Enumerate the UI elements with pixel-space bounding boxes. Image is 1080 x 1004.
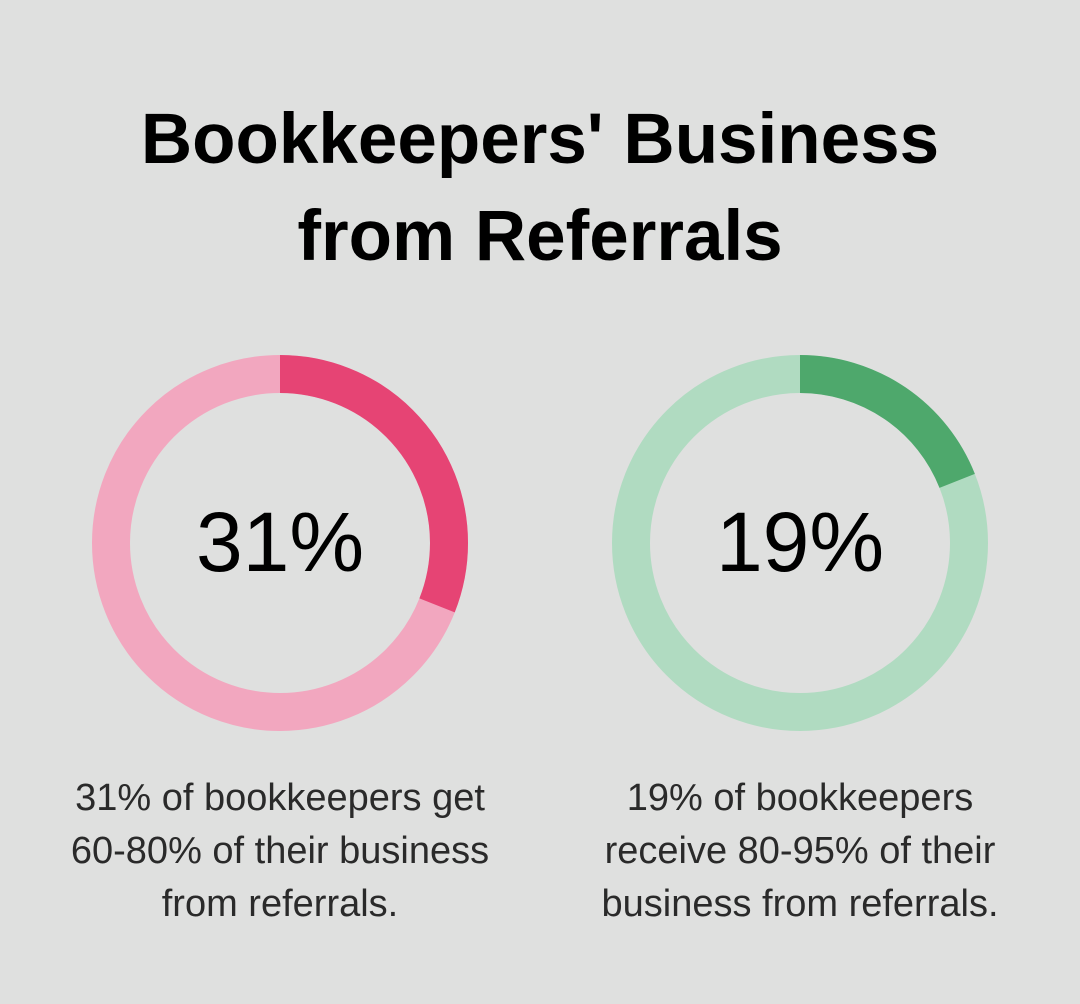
description: 19% — [601, 777, 998, 925]
description: 19%: receive 80-95% of their — [605, 830, 995, 872]
description: 31%: 31% of bookkeepers get — [75, 777, 485, 819]
donut: 31% — [111, 374, 449, 712]
donut: 19%: 19% — [716, 495, 884, 589]
donut: 31%: 31% — [196, 495, 364, 589]
description: 19%: business from referrals. — [601, 883, 998, 925]
description: 31%: from referrals. — [162, 883, 398, 925]
description: 31%: 60-80% of their business — [71, 830, 489, 872]
description: 19%: 19% of bookkeepers — [627, 777, 973, 819]
title: from Referrals — [297, 197, 783, 276]
donut: 19% — [631, 374, 969, 712]
description: 31% — [71, 777, 489, 925]
title — [141, 100, 939, 276]
title: Bookkeepers' Business — [141, 100, 939, 179]
